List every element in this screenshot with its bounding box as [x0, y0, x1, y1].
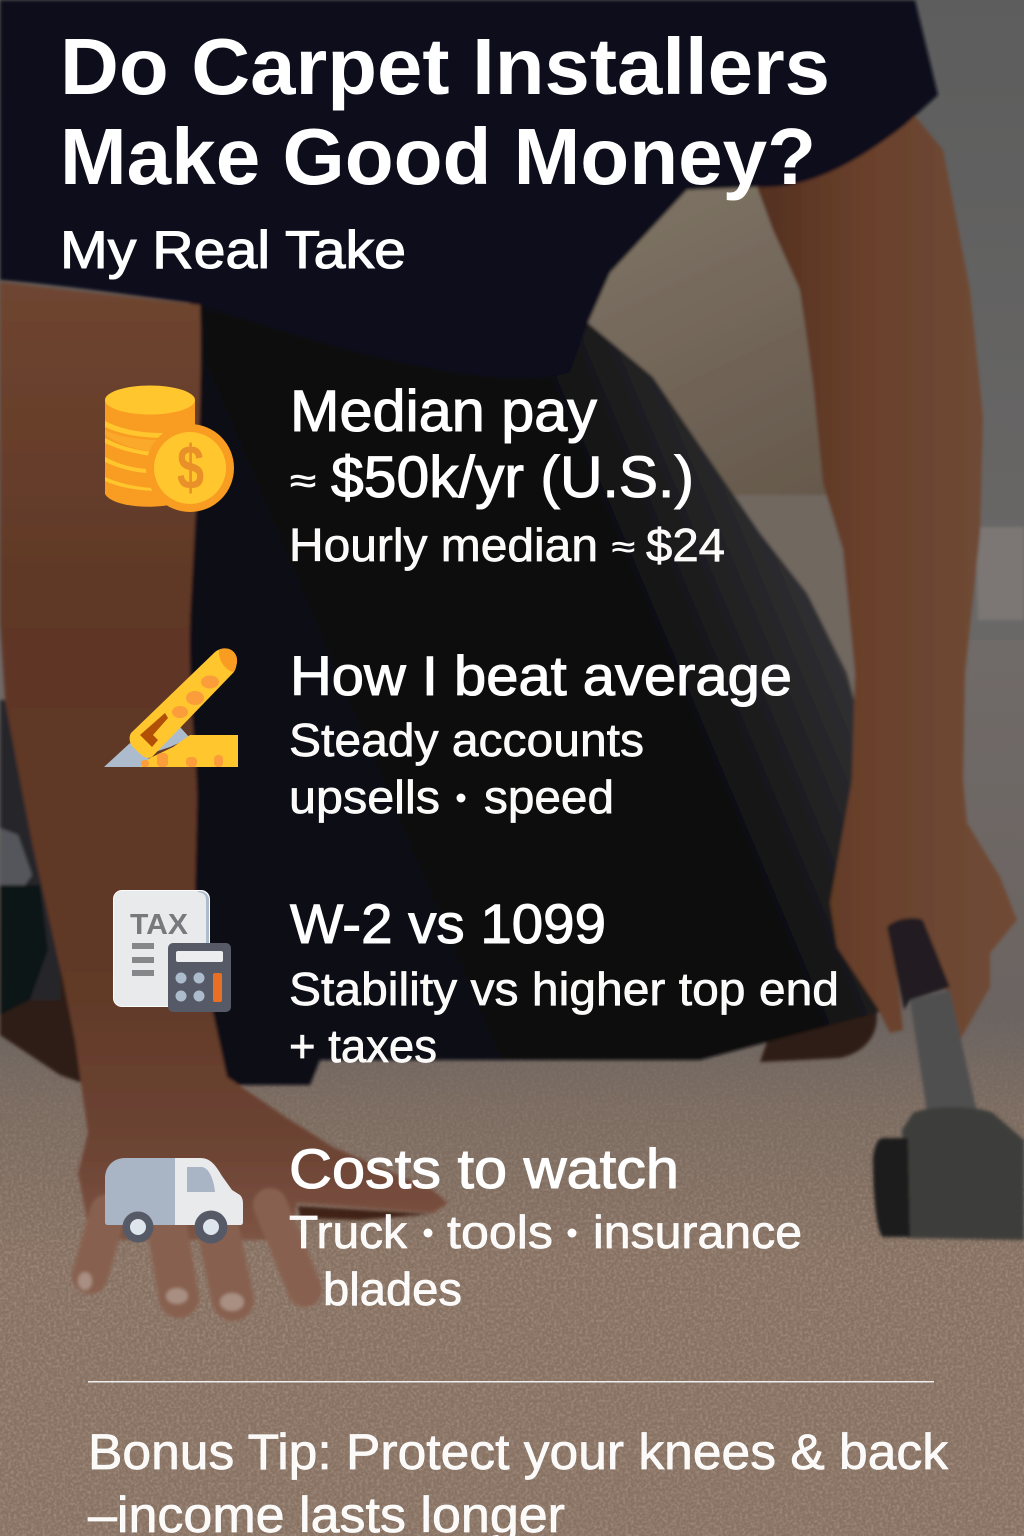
heading: costs: Costs to watch: [289, 1137, 679, 1200]
subtitle: My Real Take: [60, 221, 406, 280]
detail: accounts: Steady accounts: [289, 714, 644, 766]
item: W-2 vs 1099: [113, 890, 839, 1072]
tool handle and head: [910, 990, 977, 1112]
left arm and hand: [0, 282, 448, 1240]
heading: beat average: How I beat average: [290, 644, 792, 707]
value: 50k: $50k/yr (U.S.): [331, 445, 694, 510]
icon: coins: $: [177, 434, 204, 503]
detail: hourly: $24: [646, 519, 725, 571]
fingers: [90, 1205, 305, 1300]
detail: stability: Stability vs higher top end: [289, 963, 839, 1015]
value: 50k: ≈: [290, 460, 316, 501]
detail: truck tools insurance: Truck: [289, 1206, 408, 1258]
detail: taxes: + taxes: [289, 1020, 437, 1072]
detail: upsells: speed: [484, 771, 614, 823]
right arm and hand: [757, 110, 1017, 1040]
item: costs: [105, 1137, 802, 1315]
icon: tax form and calculator: [113, 890, 231, 1012]
fingernails: [78, 1272, 244, 1311]
detail: truck tools insurance: [289, 1206, 802, 1258]
detail: truck tools insurance: tools: [447, 1206, 553, 1258]
bonus tip: [88, 1424, 949, 1536]
icon: coins: [105, 386, 234, 512]
icon: utility knife: [104, 648, 238, 767]
bonus tip: Bonus Tip: Protect your knees & back: [88, 1424, 949, 1480]
detail: upsells: [289, 771, 614, 823]
detail: blades: blades: [323, 1263, 462, 1315]
icon: tax form and calculator: TAX: [130, 909, 189, 941]
shirt: [0, 0, 938, 378]
detail: hourly: ≈: [612, 531, 635, 564]
wall between arm and leg: [580, 180, 870, 700]
heading: median pay: Median pay: [290, 379, 597, 444]
heading: W-2 vs 1099: W-2 vs 1099: [290, 892, 606, 955]
title: [60, 22, 830, 201]
icon: delivery truck: [105, 1158, 243, 1244]
detail: hourly: [289, 519, 725, 571]
knee shadow and shoe: [760, 1005, 877, 1062]
title: Do Carpet Installers: [60, 22, 830, 111]
item: median pay: [105, 379, 725, 571]
detail: upsells: upsells: [289, 771, 440, 823]
item: beat average: [104, 644, 792, 823]
pants: [185, 300, 880, 1085]
detail: truck tools insurance: insurance: [593, 1206, 802, 1258]
detail: hourly: Hourly median: [289, 519, 598, 571]
title: Make Good Money?: [60, 112, 816, 201]
